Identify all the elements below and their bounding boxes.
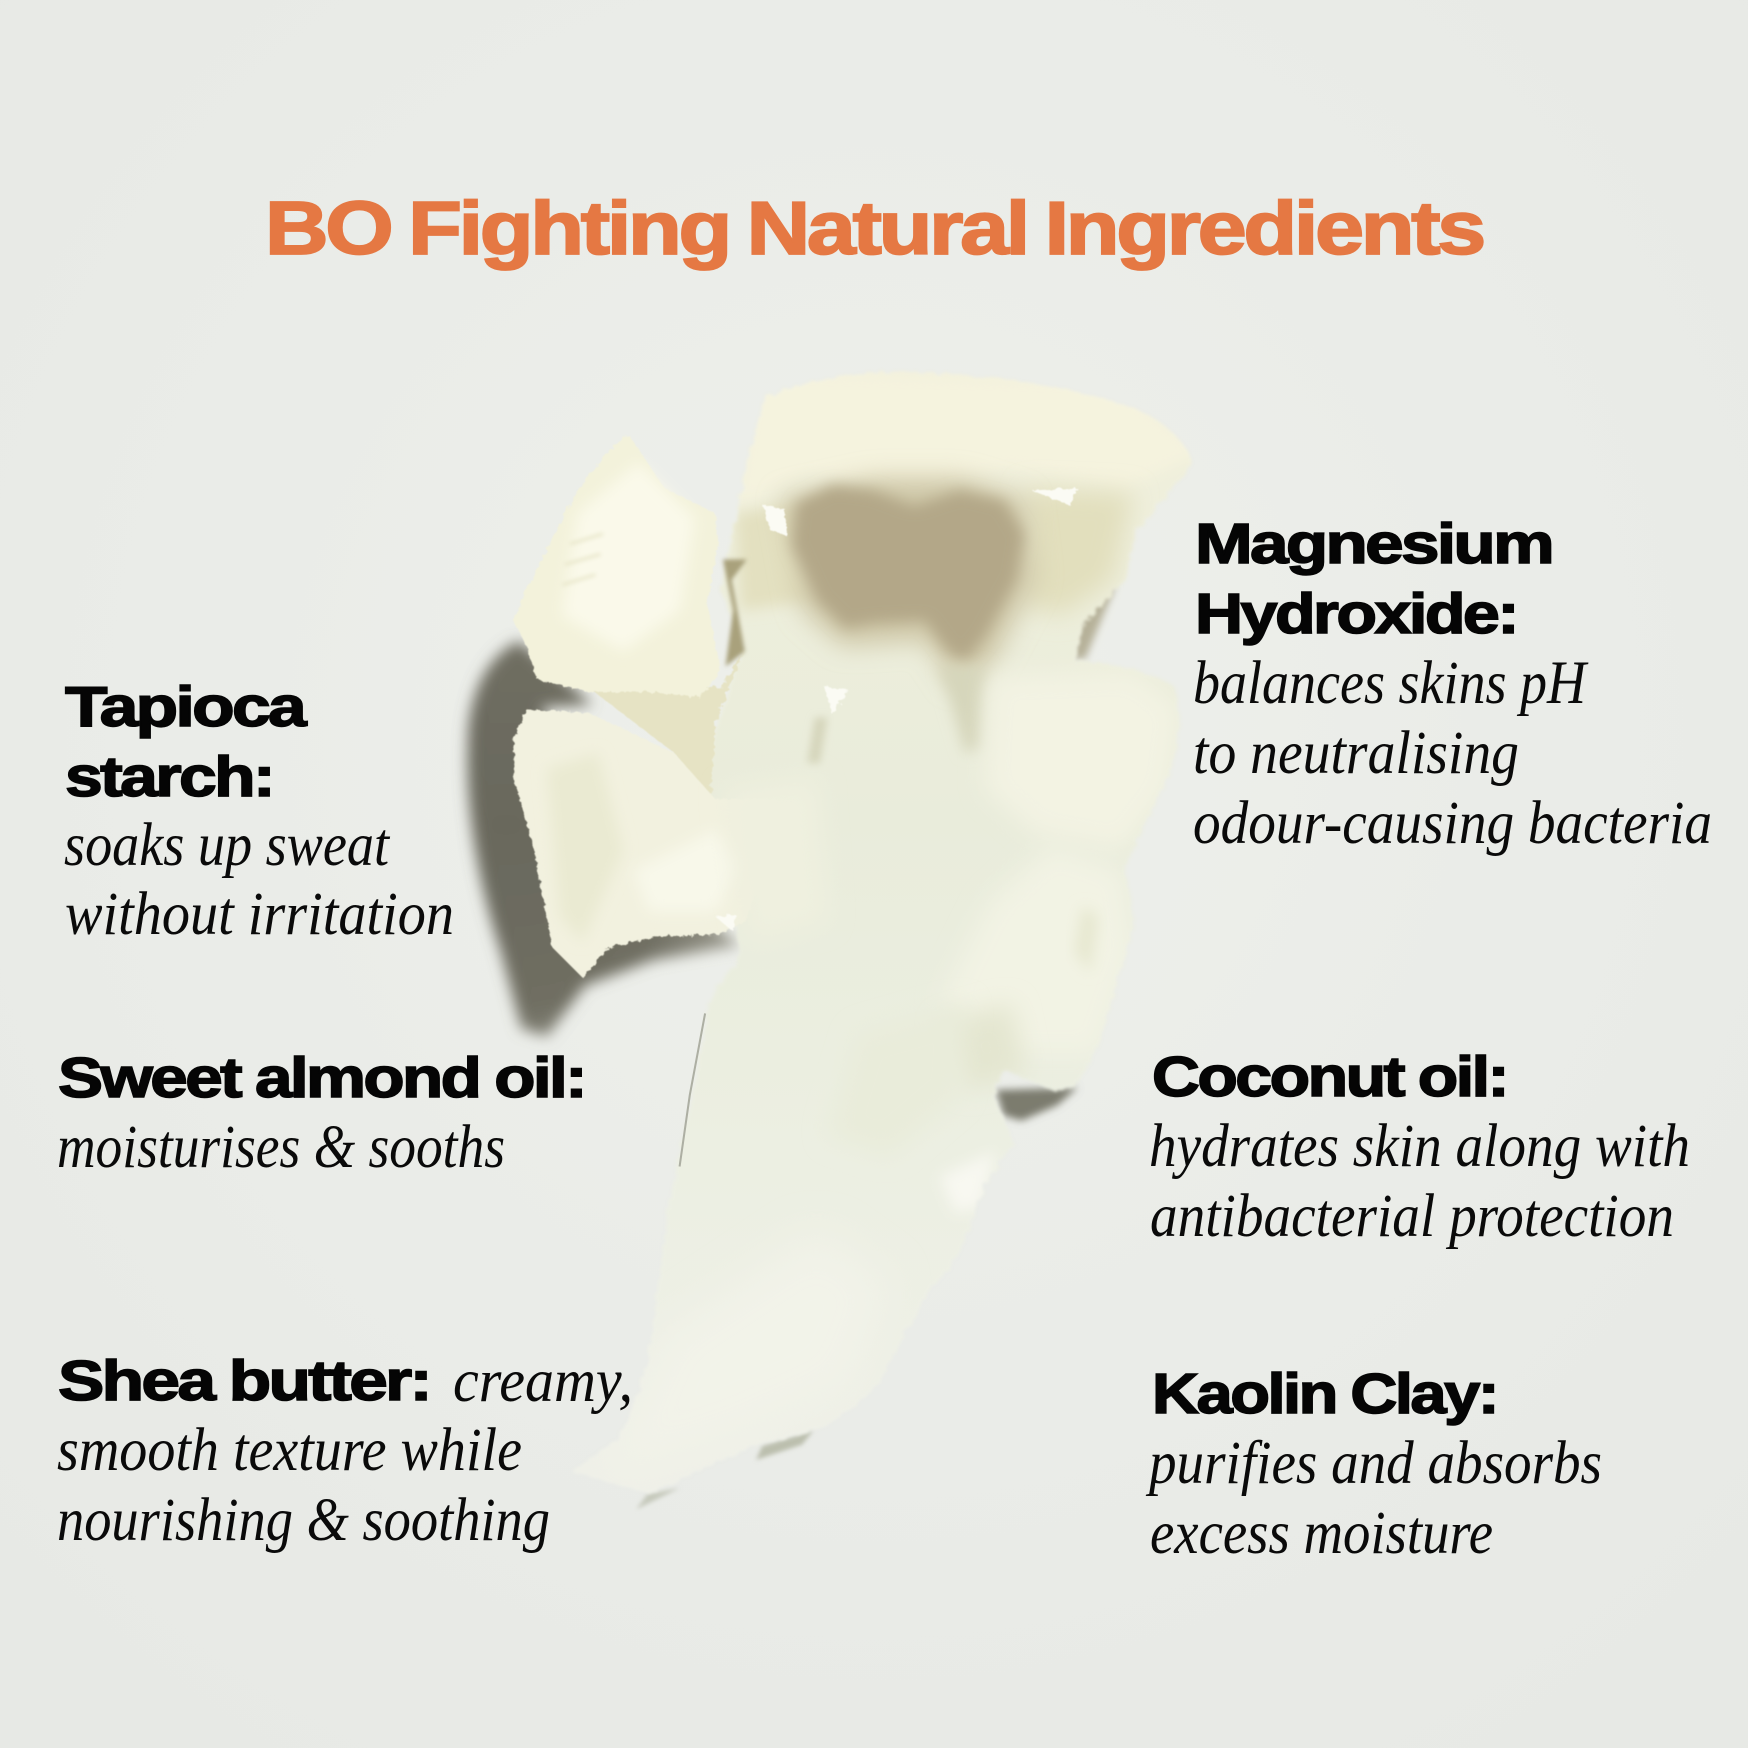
heading: Tapioca [65, 675, 308, 739]
description: purifies and absorbs [1145, 1430, 1602, 1497]
description [1193, 650, 1712, 857]
body and smear [648, 371, 1191, 1494]
chunk: lower left [514, 710, 777, 978]
infographic canvas [58, 198, 1710, 1554]
description: soaks up sweat [64, 812, 391, 879]
description: balances skins pH [1193, 650, 1589, 717]
ridges on upper chunk [562, 534, 603, 585]
top block light [736, 371, 1205, 508]
description: smooth texture while [57, 1417, 522, 1484]
heading: Kaolin Clay: [1152, 1362, 1497, 1426]
brown translucent band [792, 485, 1024, 661]
smear tone [603, 1233, 889, 1478]
chunk: upper left [514, 434, 720, 697]
description [1145, 1430, 1602, 1567]
title: BO Fighting Natural Ingredients [265, 186, 1483, 270]
ingredient: Magnesium Hydroxide [1193, 512, 1712, 857]
cast shadow [467, 641, 741, 1036]
description: hydrates skin along with [1149, 1113, 1690, 1180]
heading: Coconut oil: [1152, 1045, 1507, 1109]
description: nourishing & soothing [57, 1487, 550, 1554]
ingredient: Coconut oil [1149, 1045, 1690, 1250]
small shadow right of block [1072, 585, 1116, 659]
right lump [999, 709, 1158, 834]
ingredient: Tapioca starch [64, 675, 454, 948]
description: antibacterial protection [1150, 1183, 1674, 1250]
junction blend between chunk and body [726, 779, 828, 942]
description: moisturises & sooths [57, 1114, 505, 1181]
description [57, 1348, 633, 1554]
lower right lump [999, 867, 1112, 930]
ingredient: Sweet almond oil [57, 1046, 585, 1181]
heading: Sweet almond oil: [58, 1046, 585, 1110]
description: to neutralising [1193, 720, 1519, 787]
streak crack [680, 1013, 705, 1167]
shadow under lower right lump [996, 1087, 1078, 1121]
description: excess moisture [1150, 1500, 1493, 1567]
heading [65, 675, 308, 809]
left yellow shading [733, 504, 804, 612]
brown halo [782, 478, 1037, 687]
heading: Hydroxide: [1195, 582, 1517, 646]
ingredient: Kaolin Clay [1145, 1362, 1602, 1567]
heading: starch: [65, 745, 273, 809]
description: without irritation [65, 881, 454, 948]
heading: Magnesium [1195, 512, 1552, 576]
right yellow shading [1021, 488, 1134, 616]
heading [1195, 512, 1552, 646]
description [1149, 1113, 1690, 1250]
yellow gap between chunks [588, 651, 743, 802]
description: creamy, [453, 1348, 633, 1415]
heading: Shea butter: [58, 1349, 430, 1413]
drip shadow [942, 676, 986, 754]
photo: shea butter chunks and smear [457, 371, 1191, 1509]
white crumbs [715, 488, 1078, 932]
ingredient: Shea butter [57, 1348, 633, 1554]
description [64, 812, 454, 948]
bottom smear shadow [756, 1431, 813, 1460]
